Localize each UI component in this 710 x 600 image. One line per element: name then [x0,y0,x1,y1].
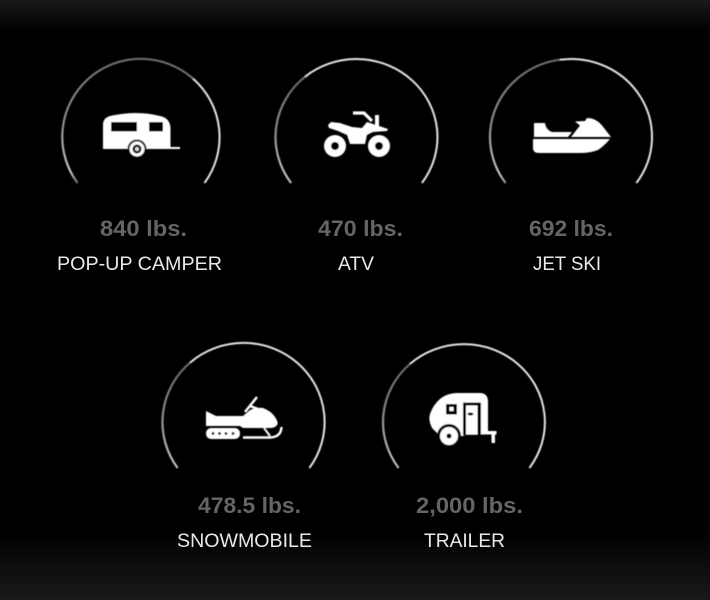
label: pop-up camper: POP-UP CAMPER [57,253,222,275]
icon: camper [103,113,180,158]
panel: jet ski [490,59,652,275]
panel: atv [276,59,437,275]
weight: 470 lbs.: 470 lbs. [318,216,403,241]
icon: trailer [429,393,496,448]
icon: jet ski [533,118,611,153]
label: jet ski: JET SKI [533,253,601,275]
icon: snowmobile [206,397,282,439]
gauge arc: jet ski [490,59,652,183]
icon: atv [324,113,390,157]
gauge arc: snowmobile [162,343,325,468]
weight: 2,000 lbs.: 2,000 lbs. [416,493,523,518]
label: snowmobile: SNOWMOBILE [177,530,312,552]
gauge arc: atv [276,59,437,183]
panel: trailer [383,344,545,552]
label: atv: ATV [338,253,374,275]
weight: 692 lbs.: 692 lbs. [529,216,613,241]
weight: 478.5 lbs.: 478.5 lbs. [198,493,301,518]
label: trailer: TRAILER [424,530,505,552]
weight: 840 lbs.: 840 lbs. [100,216,187,241]
gauge arc: pop-up camper [62,59,220,183]
panel: pop-up camper [57,59,222,275]
panel: snowmobile [162,343,325,552]
gauge arc: trailer [383,344,545,468]
